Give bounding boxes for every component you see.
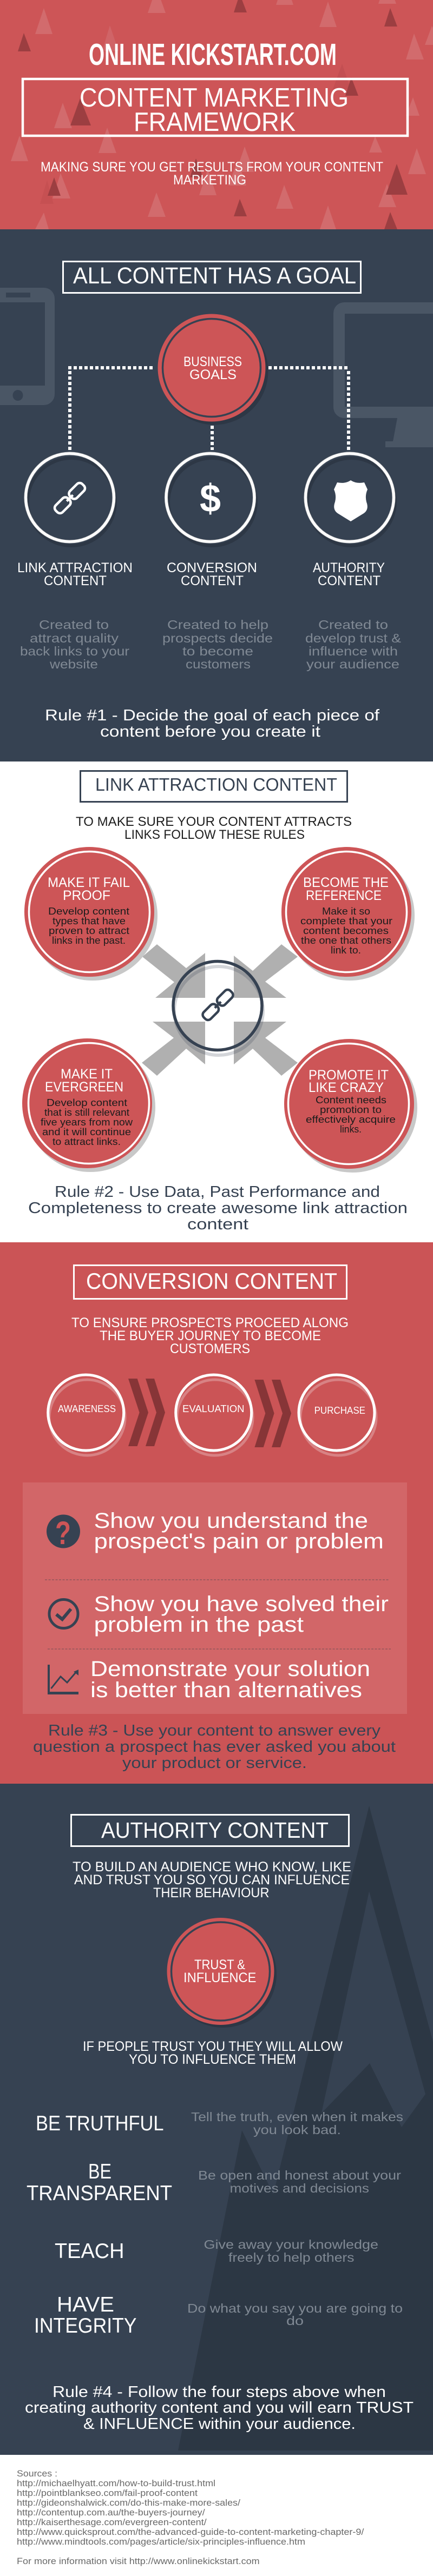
intro text	[76, 814, 352, 842]
text: understand	[94, 1509, 384, 1553]
heading box: LINK ATTRACTION CONTENT	[95, 775, 337, 795]
intro text: LINKS FOLLOW THESE RULES	[124, 827, 305, 842]
description: authority: your audience	[306, 657, 399, 671]
principle: be truthful: BE TRUTHFUL	[36, 2112, 163, 2135]
step: awareness: AWARENESS	[58, 1403, 116, 1414]
circle: trust and influence: INFLUENCE	[183, 1970, 257, 1985]
principle: be transparent: BE	[88, 2160, 111, 2183]
text: demonstrate: is better than alternatives	[90, 1678, 362, 1702]
rule 1	[45, 707, 380, 740]
description: transparent: motives and decisions	[229, 2181, 369, 2195]
step: evaluation: EVALUATION	[182, 1403, 245, 1414]
subhead: IF PEOPLE TRUST YOU THEY WILL ALLOW	[83, 2039, 343, 2054]
dotted connectors	[68, 368, 350, 450]
description: link attraction: back links to your	[20, 644, 129, 658]
circle: promote it like crazy: promotion to	[320, 1104, 382, 1115]
text: solved: Show you have solved their	[94, 1592, 389, 1616]
circle: promote it like crazy: LIKE CRAZY	[309, 1080, 384, 1095]
label: conversion	[167, 560, 257, 588]
intro text: THE BUYER JOURNEY TO BECOME	[100, 1328, 321, 1343]
description: link attraction: attract quality	[30, 631, 119, 645]
intro text	[71, 1315, 349, 1356]
icon: monitor watermark	[333, 302, 433, 447]
intro text: THEIR BEHAVIOUR	[153, 1885, 270, 1900]
footer: sources: http://gideonshalwick.com/do-this-make-more-sales/	[17, 2498, 240, 2508]
icon: check	[49, 1600, 78, 1628]
rule 3: your product or service.	[122, 1754, 307, 1772]
rule 4: Rule #4 - Follow the four steps above when	[53, 2383, 386, 2401]
circle: make it evergreen: that is still relevant	[44, 1107, 129, 1118]
icon: chain link	[201, 988, 234, 1022]
description: link attraction: Created to	[39, 618, 109, 632]
circle: promote it like crazy: links.	[340, 1124, 362, 1135]
heading box: AUTHORITY CONTENT	[101, 1818, 329, 1843]
principle: have integrity: INTEGRITY	[34, 2314, 136, 2337]
heading box	[71, 1815, 349, 1846]
label: conversion: CONTENT	[181, 573, 244, 588]
footer: sources: http://contentup.com.au/the-buyers-journey/	[17, 2507, 205, 2518]
label: link attraction: CONTENT	[44, 573, 107, 588]
circle: dollar icon	[166, 453, 256, 546]
description: conversion: customers	[186, 657, 251, 671]
title box: FRAMEWORK	[134, 108, 296, 137]
circle: make it evergreen	[22, 1038, 155, 1172]
step: purchase: PURCHASE	[314, 1405, 365, 1416]
rule 3	[33, 1722, 396, 1772]
circle: become the reference: link to.	[331, 945, 361, 956]
description: transparent	[198, 2168, 401, 2195]
description: integrity: Do what you say you are going to	[187, 2301, 403, 2315]
heading box: ALL CONTENT HAS A GOAL	[73, 263, 356, 289]
rule 4	[25, 2383, 414, 2433]
text: demonstrate	[90, 1657, 370, 1702]
icon: chart	[48, 1665, 78, 1694]
subtitle	[41, 160, 383, 188]
logo watermark	[178, 1806, 433, 2451]
label: link attraction: LINK ATTRACTION	[17, 560, 133, 575]
circle: make it evergreen: Develop content	[47, 1097, 127, 1108]
description: integrity: do	[286, 2314, 304, 2328]
panel: conversion content	[0, 1242, 433, 1784]
arrows: gray cross	[142, 944, 298, 1076]
panel: header	[0, 0, 433, 231]
step: purchase	[299, 1375, 376, 1455]
circle: promote it like crazy: PROMOTE IT	[309, 1068, 389, 1083]
circle: make it evergreen: and it will continue	[42, 1127, 131, 1137]
circle: make it evergreen: five years from now	[41, 1117, 133, 1128]
circle: make it evergreen: EVERGREEN	[45, 1080, 123, 1095]
circle: make it fail proof: types that have	[53, 916, 126, 926]
subhead: YOU TO INFLUENCE THEM	[129, 2052, 296, 2067]
circle: trust and influence: TRUST &	[194, 1957, 245, 1972]
icon: chain link	[53, 481, 87, 515]
arrow: chevrons 1	[128, 1379, 165, 1446]
circle: make it evergreen: to attract links.	[53, 1136, 121, 1147]
intro text	[73, 1859, 351, 1900]
circle: promote it like crazy	[284, 1039, 417, 1173]
principle: teach: TEACH	[55, 2240, 124, 2263]
description: transparent: Be open and honest about your	[198, 2168, 401, 2182]
footer: sources	[0, 2455, 433, 2576]
label: conversion: CONVERSION	[167, 560, 257, 575]
footer: sources: For more information visit http://www.onlinekickstart.com	[17, 2556, 260, 2566]
rule 1: content before you create it	[100, 723, 320, 740]
circle: make it evergreen: MAKE IT	[61, 1067, 113, 1082]
label: authority: AUTHORITY	[313, 560, 385, 575]
circle: become the reference: Make it so	[322, 906, 370, 917]
circle: center link	[173, 962, 263, 1055]
description: truthful	[191, 2110, 403, 2137]
circle: become the reference: the one that others	[301, 935, 391, 946]
circle: make it fail proof: MAKE IT FAIL	[48, 875, 130, 890]
step: awareness	[48, 1375, 125, 1455]
description: conversion: prospects decide	[162, 631, 273, 645]
description: conversion: to become	[182, 644, 253, 658]
label: link attraction	[17, 560, 133, 588]
description: authority: Created to	[318, 618, 388, 632]
text: understand: prospect's pain or problem	[94, 1529, 384, 1553]
panel: link attraction content	[0, 761, 433, 1242]
triangle pattern	[11, 0, 433, 231]
panel: tactics	[23, 1482, 407, 1714]
description: link attraction: website	[49, 657, 98, 671]
circle: become the reference	[281, 847, 415, 981]
description: truthful: you look bad.	[253, 2123, 341, 2137]
footer: sources: http://kaiserthesage.com/evergreen-content/	[17, 2517, 207, 2527]
subhead	[83, 2039, 343, 2067]
title box: CONTENT MARKETING	[80, 83, 349, 112]
rule 3: question a prospect has ever asked you about	[33, 1738, 396, 1756]
label: authority	[313, 560, 385, 588]
description: conversion	[162, 618, 273, 671]
rule 2: content	[187, 1216, 248, 1233]
rule 3: Rule #3 - Use your content to answer every	[48, 1722, 381, 1739]
icon: phone watermark	[0, 288, 55, 405]
rule 2: Rule #2 - Use Data, Past Performance and	[55, 1183, 380, 1201]
icon: dollar: $	[200, 477, 221, 520]
icon: question: ?	[55, 1515, 71, 1551]
rule 4: creating authority content and you will earn TRUST	[25, 2399, 414, 2416]
description: truthful: Tell the truth, even when it makes	[191, 2110, 403, 2124]
description: authority	[305, 618, 401, 671]
description: integrity	[187, 2301, 403, 2328]
circle: business goals: GOALS	[189, 367, 237, 382]
footer: sources: http://www.quicksprout.com/the-advanced-guide-to-content-marketing-chapter-9/	[17, 2527, 364, 2537]
intro text: TO BUILD AN AUDIENCE WHO KNOW, LIKE	[73, 1859, 351, 1875]
circle: make it fail proof	[24, 847, 158, 981]
description: authority: develop trust &	[305, 631, 401, 645]
panel: authority content	[0, 1784, 433, 2455]
icon: question	[47, 1514, 80, 1551]
principle: have integrity	[34, 2293, 136, 2337]
circle: trust and influence	[167, 1918, 277, 2028]
heading box: CONVERSION CONTENT	[86, 1268, 337, 1294]
description: teach: freely to help others	[228, 2250, 354, 2264]
circle: business goals: BUSINESS	[183, 354, 242, 369]
footer: sources: Sources :	[17, 2468, 57, 2479]
icon: shield	[334, 480, 368, 521]
description: authority: influence with	[309, 644, 398, 658]
footer: sources: http://www.mindtools.com/pages/article/six-principles-influence.htm	[17, 2537, 305, 2547]
rule 4: & INFLUENCE within your audience.	[83, 2415, 356, 2433]
text: understand: Show you understand the	[94, 1509, 368, 1533]
circle: become the reference: complete that your	[300, 916, 392, 926]
circle: promote it like crazy: Content needs	[316, 1095, 386, 1105]
description: link attraction	[20, 618, 129, 671]
circle: make it fail proof: Develop content	[48, 906, 129, 917]
footer: sources: http://pointblankseo.com/fail-proof-content	[17, 2488, 198, 2498]
title box	[23, 79, 408, 137]
rule 2: Completeness to create awesome link attraction	[28, 1200, 408, 1217]
text: demonstrate: Demonstrate your solution	[90, 1657, 370, 1681]
description: teach: Give away your knowledge	[204, 2237, 378, 2251]
circle: shield icon	[305, 453, 395, 546]
intro text: TO ENSURE PROSPECTS PROCEED ALONG	[71, 1315, 349, 1330]
subtitle: MAKING SURE YOU GET RESULTS FROM YOUR CONTENT	[41, 160, 383, 175]
heading box	[80, 771, 347, 802]
intro text: CUSTOMERS	[170, 1341, 250, 1356]
arrow: chevrons 2	[254, 1380, 291, 1447]
text: solved: problem in the past	[94, 1613, 304, 1637]
rule 1: Rule #1 - Decide the goal of each piece of	[45, 707, 380, 724]
principle: be transparent: TRANSPARENT	[27, 2182, 172, 2205]
principle: have integrity: HAVE	[57, 2293, 114, 2316]
intro text: AND TRUST YOU SO YOU CAN INFLUENCE	[74, 1872, 350, 1888]
panel: all content has a goal	[0, 229, 433, 761]
circle: become the reference: BECOME THE	[303, 875, 389, 890]
rule 2	[28, 1183, 408, 1233]
text: solved	[94, 1592, 389, 1637]
intro text: TO MAKE SURE YOUR CONTENT ATTRACTS	[76, 814, 352, 829]
circle: make it fail proof: proven to attract	[49, 925, 129, 936]
description: teach	[204, 2237, 378, 2264]
circle: become the reference: content becomes	[303, 925, 389, 936]
subtitle: MARKETING	[173, 173, 246, 188]
circle: link icon	[26, 453, 115, 546]
step: evaluation	[176, 1375, 253, 1455]
circle: make it fail proof: links in the past.	[52, 935, 126, 946]
footer: sources: http://michaelhyatt.com/how-to-build-trust.html	[17, 2478, 215, 2488]
circle: business goals	[158, 314, 268, 425]
label: authority: CONTENT	[318, 573, 380, 588]
circle: become the reference: REFERENCE	[306, 888, 382, 903]
circle: promote it like crazy: effectively acquire	[306, 1114, 396, 1125]
circle: make it fail proof: PROOF	[63, 888, 110, 903]
description: conversion: Created to help	[167, 618, 268, 632]
principle: be transparent	[27, 2160, 172, 2205]
